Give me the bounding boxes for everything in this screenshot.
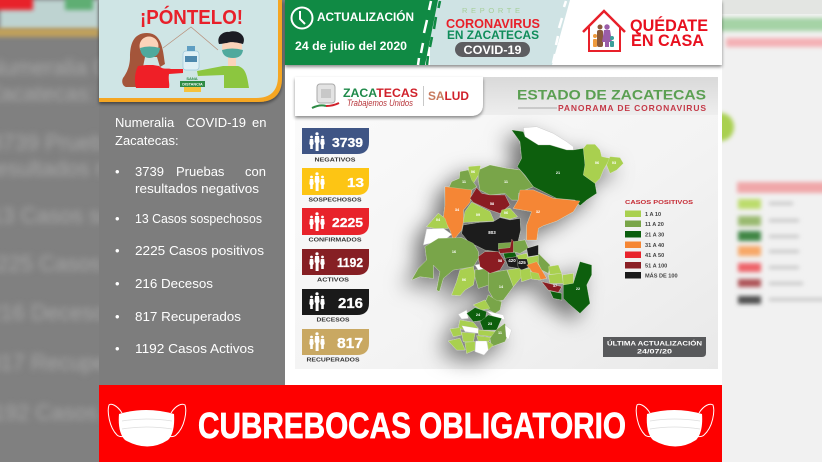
- map value labels: 34: [455, 208, 460, 212]
- legend: casos positivos: 1 A 10: [645, 212, 661, 218]
- map value labels: 425: [518, 260, 526, 265]
- map value labels: 11: [462, 180, 466, 184]
- sana distancia badge: [180, 76, 205, 92]
- map value labels: 22: [576, 287, 580, 291]
- icon: left face mask: [108, 404, 186, 446]
- panel: map background: [295, 77, 718, 369]
- statistics list: en: [252, 115, 266, 130]
- report title: CORONAVIRUS: [446, 17, 540, 31]
- statistics list: •: [115, 211, 120, 226]
- map value labels: 06: [471, 170, 475, 174]
- card: decesos: [302, 289, 369, 324]
- card: sospechosos: [302, 168, 369, 204]
- last update box: [603, 337, 706, 357]
- legend: casos positivos: CASOS POSITIVOS: [625, 200, 693, 206]
- right blurred background strip: [708, 0, 822, 462]
- map heading band: [470, 77, 718, 115]
- card: sospechosos: SOSPECHOSOS: [308, 198, 362, 204]
- card: activos: ACTIVOS: [317, 278, 349, 284]
- card: confirmados: [302, 208, 369, 244]
- map value labels: 06: [504, 211, 508, 215]
- map value labels: 11: [504, 180, 508, 184]
- statistics list: •: [115, 243, 120, 258]
- statistics list: 817 Recuperados: [135, 309, 242, 324]
- icon: hand sanitizer: [183, 46, 199, 70]
- health wordmark: SALUD: [428, 91, 469, 103]
- panel: ¡Póntelo! poster: [99, 0, 282, 102]
- stat cards: [302, 128, 369, 364]
- map value labels: 58: [498, 259, 502, 263]
- stay home message: EN CASA: [631, 32, 704, 50]
- statistics list: Pruebas: [176, 164, 225, 179]
- map value labels: 23: [488, 322, 492, 326]
- poster heading: ¡PÓNTELO!: [140, 5, 243, 29]
- card: sospechosos: 13: [347, 175, 364, 190]
- map value labels: 32: [536, 210, 540, 214]
- left blurred background strip: [0, 0, 167, 462]
- road dashes: [427, 1, 440, 65]
- report title: REPORTE: [462, 6, 520, 15]
- map value labels: 37: [553, 284, 557, 288]
- card: recuperados: [302, 329, 369, 364]
- icon: man with mask: [197, 31, 249, 88]
- left text panel: [99, 0, 285, 385]
- northern municipalities: [423, 127, 623, 253]
- statistics list: Zacatecas:: [115, 133, 179, 148]
- report title: EN ZACATECAS: [447, 28, 539, 42]
- last update box: ÚLTIMA ACTUALIZACIÓN: [607, 340, 702, 348]
- card: negativos: [302, 128, 369, 164]
- map value labels: 11: [498, 331, 502, 335]
- card: confirmados: 2225: [332, 216, 363, 230]
- card: recuperados: 817: [337, 336, 363, 352]
- COVID-19 pill: [455, 42, 530, 57]
- panel: white report background: [285, 0, 722, 385]
- stay home message: [630, 16, 708, 50]
- statistics list: •: [115, 341, 120, 356]
- panel: header band: [285, 0, 722, 65]
- sana distancia badge: DISTANCIA: [182, 82, 203, 86]
- legend: casos positivos: 41 A 50: [645, 253, 664, 259]
- statistics list: resultados negativos: [135, 181, 260, 196]
- legend: casos positivos: 51 A 100: [645, 264, 667, 270]
- statistics list: 3739: [135, 164, 164, 179]
- report title: [446, 6, 540, 42]
- choropleth map of Zacatecas: [412, 127, 623, 355]
- map value labels: 06: [462, 278, 466, 282]
- icon: house with family: [583, 11, 625, 51]
- statistics list: •: [115, 309, 120, 324]
- map value labels: 06: [595, 161, 599, 165]
- statistics list: •: [115, 164, 120, 179]
- legend: casos positivos: MÁS DE 100: [645, 272, 678, 280]
- map value labels: 803: [488, 230, 496, 235]
- map value labels: 58: [490, 202, 494, 206]
- COVID-19 pill: COVID-19: [464, 43, 522, 57]
- card: decesos: DECESOS: [316, 318, 350, 324]
- icon: woman with mask: [122, 33, 183, 88]
- legend: casos positivos: 11 A 20: [645, 222, 664, 228]
- Zacatecas wordmark: ZACATECAS: [343, 88, 418, 100]
- statistics list: [115, 115, 266, 356]
- banner text: CUBREBOCAS OBLIGATORIO: [198, 405, 626, 446]
- map value labels: 16: [452, 250, 456, 254]
- update date: 24 de julio del 2020: [295, 41, 407, 53]
- statistics list: con: [245, 164, 266, 179]
- legend: casos positivos: 31 A 40: [645, 243, 664, 249]
- map value labels: 03: [612, 161, 616, 165]
- map value labels: 09: [476, 213, 480, 217]
- slogan: Trabajemos Unidos: [347, 98, 413, 108]
- icon: right face mask: [636, 404, 714, 446]
- sana distancia badge: SANA: [186, 76, 198, 81]
- card: negativos: NEGATIVOS: [314, 158, 356, 164]
- statistics list: 2225 Casos positivos: [135, 243, 265, 258]
- icon: clock: [292, 8, 312, 28]
- card: activos: 1192: [337, 256, 363, 270]
- card: negativos: 3739: [332, 136, 363, 150]
- update label: ACTUALIZACIÓN: [317, 11, 414, 24]
- statistics list: 216 Decesos: [135, 276, 214, 291]
- statistics list: 1192 Casos Activos: [135, 341, 255, 356]
- card: recuperados: RECUPERADOS: [306, 358, 360, 364]
- statistics list: Numeralia: [115, 115, 175, 130]
- map value labels: 24: [476, 313, 481, 317]
- map value labels: 04: [436, 218, 441, 222]
- statistics list: •: [115, 276, 120, 291]
- card: activos: [302, 249, 369, 284]
- stay home message: QUÉDATE: [630, 16, 708, 35]
- map value labels: 14: [499, 285, 504, 289]
- state title: ESTADO DE ZACATECAS: [517, 88, 706, 102]
- map value labels: [436, 161, 616, 335]
- banner: cubrebocas obligatorio: [99, 385, 722, 462]
- icon: distance lines: [163, 27, 218, 50]
- statistics list: 13 Casos sospechosos: [135, 211, 262, 226]
- map value labels: 420: [508, 258, 516, 263]
- last update box: 24/07/20: [637, 350, 673, 356]
- statistics list: COVID-19: [186, 115, 246, 130]
- card: decesos: 216: [338, 296, 363, 312]
- state subtitle: PANORAMA DE CORONAVIRUS: [558, 103, 706, 113]
- map value labels: 21: [556, 171, 560, 175]
- central and southern municipalities: [412, 238, 592, 355]
- card: confirmados: CONFIRMADOS: [308, 238, 362, 244]
- legend: casos positivos: [625, 200, 693, 280]
- legend: casos positivos: 21 A 30: [645, 232, 664, 238]
- icon: state emblem: [312, 84, 339, 108]
- panel: government logos: [295, 77, 483, 116]
